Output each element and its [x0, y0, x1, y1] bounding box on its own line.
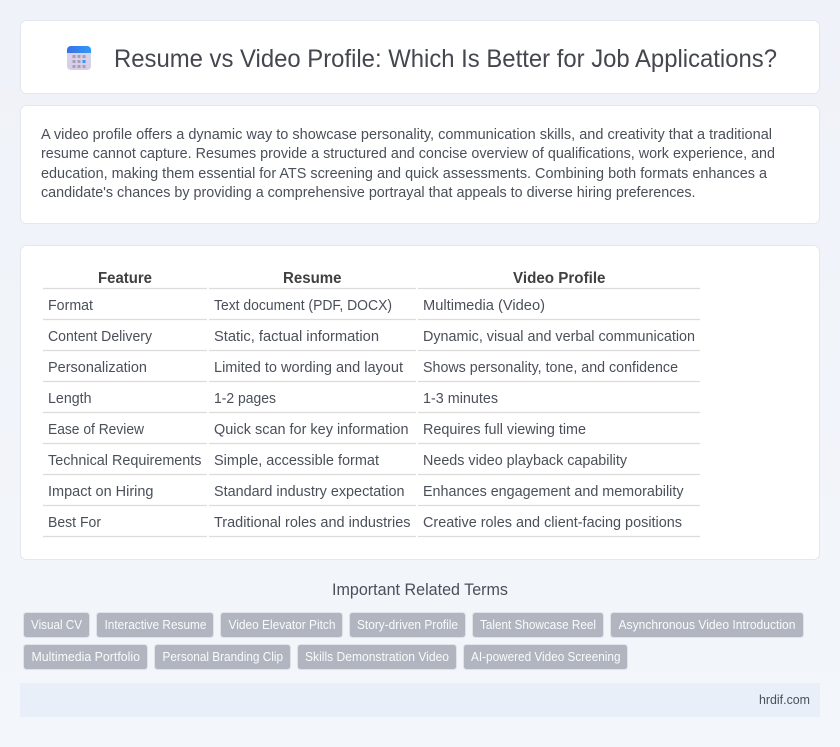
table row: Best For: Creative roles and client-facing positions — [423, 515, 682, 531]
table row: Ease of Review: Ease of Review — [48, 422, 144, 438]
panel: comparison table — [20, 246, 820, 560]
tag list: related terms — [24, 612, 804, 670]
table row: Best For: Best For — [48, 515, 101, 531]
table row: Length: 1-2 pages — [214, 391, 276, 407]
table row: Technical Requirements — [48, 453, 628, 469]
table row: Format: Format — [48, 298, 93, 314]
table header row: Feature — [98, 270, 152, 287]
tag: Asynchronous Video Introduction: Asynchronous Video Introduction — [618, 618, 796, 632]
tag: Interactive Resume: Interactive Resume — [104, 618, 206, 632]
table row: Technical Requirements: Simple, accessible format — [214, 453, 379, 469]
table row: Impact on Hiring: Impact on Hiring — [48, 484, 154, 500]
tag: AI-powered Video Screening: AI-powered Video Screening — [471, 650, 620, 664]
table row: Length: 1-3 minutes — [423, 391, 498, 407]
text block: description paragraph: A video profile offers a dynamic way to showcase personality, communication skills, and creativity that a traditional — [41, 127, 772, 143]
tag: Multimedia Portfolio — [24, 644, 148, 670]
tag: Video Elevator Pitch — [220, 612, 342, 638]
tag: Skills Demonstration Video — [298, 644, 456, 670]
tag: Skills Demonstration Video: Skills Demonstration Video — [305, 650, 449, 664]
table row: Format: Text document (PDF, DOCX) — [214, 298, 392, 314]
tag: Personal Branding Clip: Personal Branding Clip — [162, 650, 283, 664]
table row: Length — [48, 391, 498, 407]
panel: description — [20, 106, 820, 224]
table row: Length: Length — [48, 391, 92, 407]
panel: title header — [20, 20, 820, 94]
table row: Impact on Hiring: Standard industry expectation — [214, 484, 404, 500]
table row: Personalization: Shows personality, tone, and confidence — [423, 360, 678, 376]
table row: Content Delivery: Content Delivery — [48, 329, 153, 345]
text block: description paragraph — [41, 127, 775, 201]
table row: Ease of Review — [48, 422, 586, 438]
table row: Technical Requirements: Technical Requirements — [48, 453, 202, 469]
text block: description paragraph: education, making them essential for ATS screening and quick assessments. Combining both formats enhances a — [41, 166, 768, 182]
tag: Multimedia Portfolio: Multimedia Portfolio — [32, 650, 140, 664]
table header row: Resume — [283, 270, 342, 287]
tag: Video Elevator Pitch: Video Elevator Pitch — [228, 618, 336, 632]
icon: calendar — [67, 46, 91, 70]
title: Resume vs Video Profile: Which Is Better for Job Applications? — [114, 45, 777, 73]
tag: Visual CV — [24, 612, 90, 638]
tag: Asynchronous Video Introduction — [610, 612, 804, 638]
table row: Content Delivery: Dynamic, visual and verbal communication — [423, 329, 695, 345]
table row: Best For — [48, 515, 682, 531]
table row: Format — [48, 298, 545, 314]
tag: Story-driven Profile: Story-driven Profile — [357, 618, 458, 632]
table row: Content Delivery: Static, factual information — [214, 329, 379, 345]
table row: Personalization: Limited to wording and layout — [214, 360, 403, 376]
tag: Interactive Resume — [96, 612, 214, 638]
table header row — [98, 270, 606, 287]
tag: Story-driven Profile — [350, 612, 466, 638]
tag: Talent Showcase Reel — [472, 612, 604, 638]
tag: Talent Showcase Reel: Talent Showcase Reel — [480, 618, 596, 632]
footer text: source: hrdif.com — [759, 692, 810, 707]
table row: Personalization: Personalization — [48, 360, 147, 376]
tag: AI-powered Video Screening — [464, 644, 628, 670]
tag: Visual CV: Visual CV — [31, 618, 83, 632]
text block: description paragraph: resume cannot capture. Resumes provide a structured and concise overview of qualifications, work experience, and — [41, 146, 775, 162]
table row: Ease of Review: Requires full viewing time — [423, 422, 586, 438]
table row: Impact on Hiring: Enhances engagement and memorability — [423, 484, 684, 500]
table header row: Video Profile — [513, 270, 606, 287]
tag: Personal Branding Clip — [154, 644, 290, 670]
table row: Format: Multimedia (Video) — [423, 298, 545, 314]
table row: Best For: Traditional roles and industries — [214, 515, 410, 531]
table row: Ease of Review: Quick scan for key information — [214, 422, 408, 438]
table row: Personalization — [48, 360, 678, 376]
table row: Technical Requirements: Needs video playback capability — [423, 453, 628, 469]
footer bar — [20, 683, 820, 717]
table row: Content Delivery — [48, 329, 695, 345]
text block: description paragraph: candidate's chances by providing a comprehensive portrayal that appeals to diverse hiring preferences. — [41, 185, 696, 201]
heading: important related terms: Important Related Terms — [332, 581, 508, 599]
table row: Impact on Hiring — [48, 484, 684, 500]
